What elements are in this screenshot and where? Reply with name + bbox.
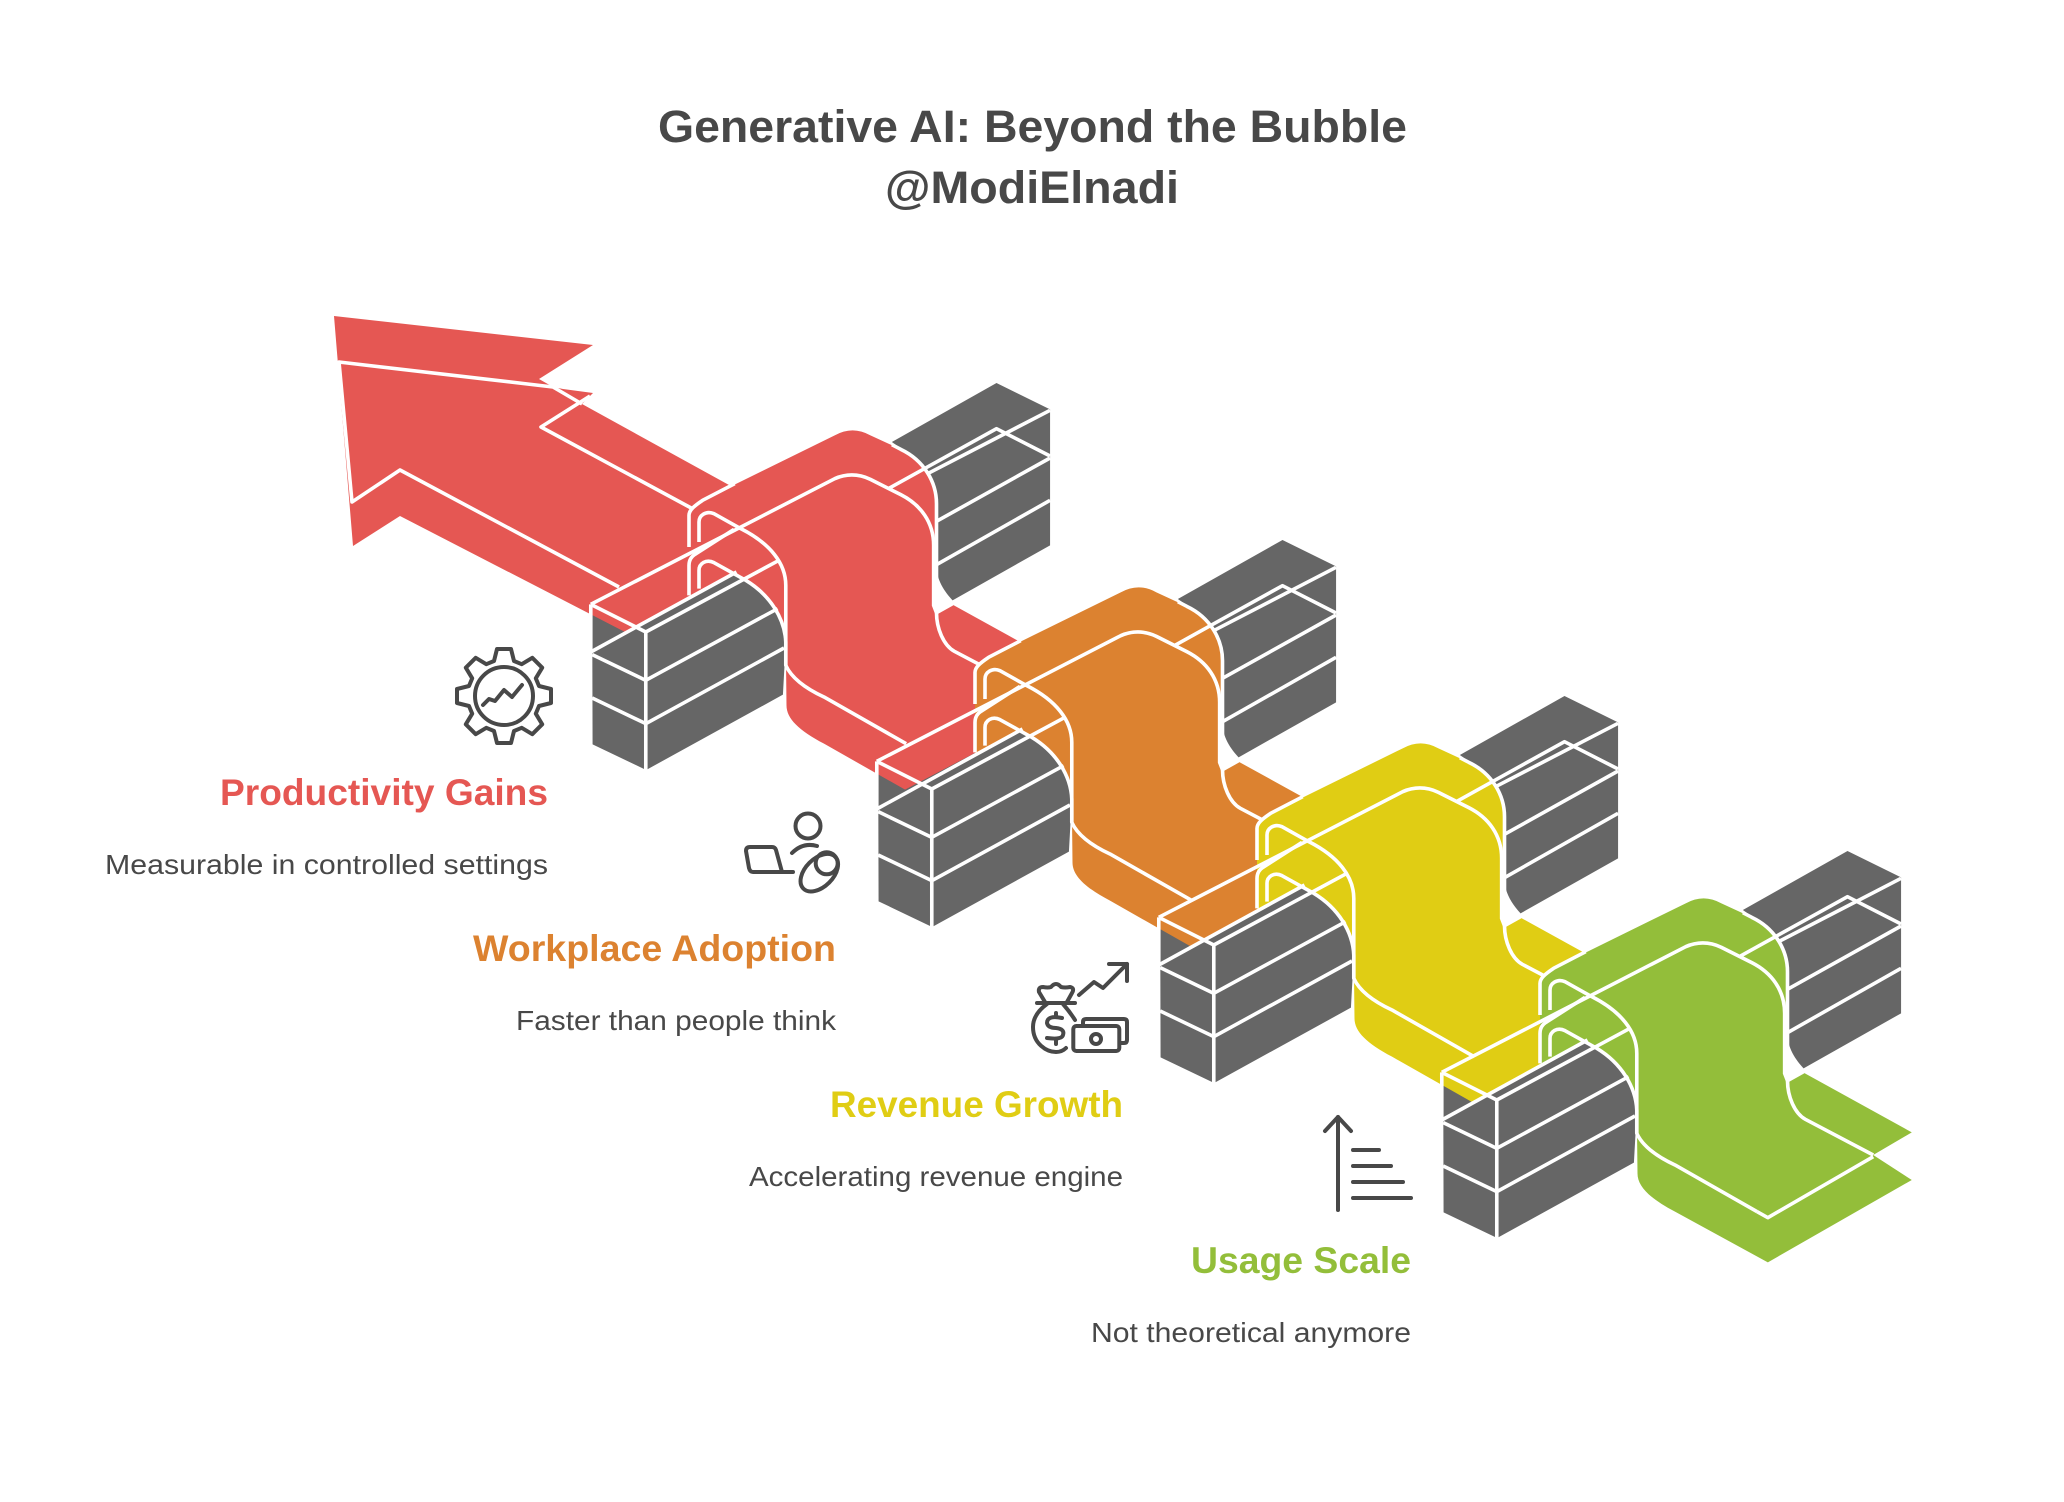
gray block stacks [592, 383, 1901, 1238]
icon: money bag, bills and rising arrow [1033, 964, 1127, 1052]
title [658, 101, 1407, 213]
text: productivity description: Measurable in controlled settings [105, 849, 548, 880]
title: Generative AI: Beyond the Bubble [658, 101, 1407, 152]
icon: person, laptop and baby [746, 814, 845, 899]
icon: up arrow with ascending bars [1325, 1117, 1411, 1210]
ribbon: revenue growth (yellow) [1159, 723, 1629, 1103]
text: workplace description: Faster than people think [516, 1005, 837, 1036]
ribbon: usage scale (green) [1442, 878, 1912, 1262]
heading: usage scale: Usage Scale [1191, 1240, 1411, 1281]
icon: gear with trend line [457, 649, 551, 743]
ribbon: productivity gains (red) [591, 410, 1061, 790]
arrow: red arrowhead and shaft [334, 316, 737, 632]
heading: productivity gains: Productivity Gains [220, 772, 548, 813]
ribbon: workplace adoption (orange) [877, 567, 1347, 947]
heading: revenue growth: Revenue Growth [830, 1084, 1123, 1125]
text: usage description: Not theoretical anymore [1091, 1317, 1411, 1348]
title: @ModiElnadi [885, 162, 1179, 213]
heading: workplace adoption: Workplace Adoption [473, 928, 836, 969]
text: revenue description: Accelerating revenue engine [749, 1161, 1123, 1192]
